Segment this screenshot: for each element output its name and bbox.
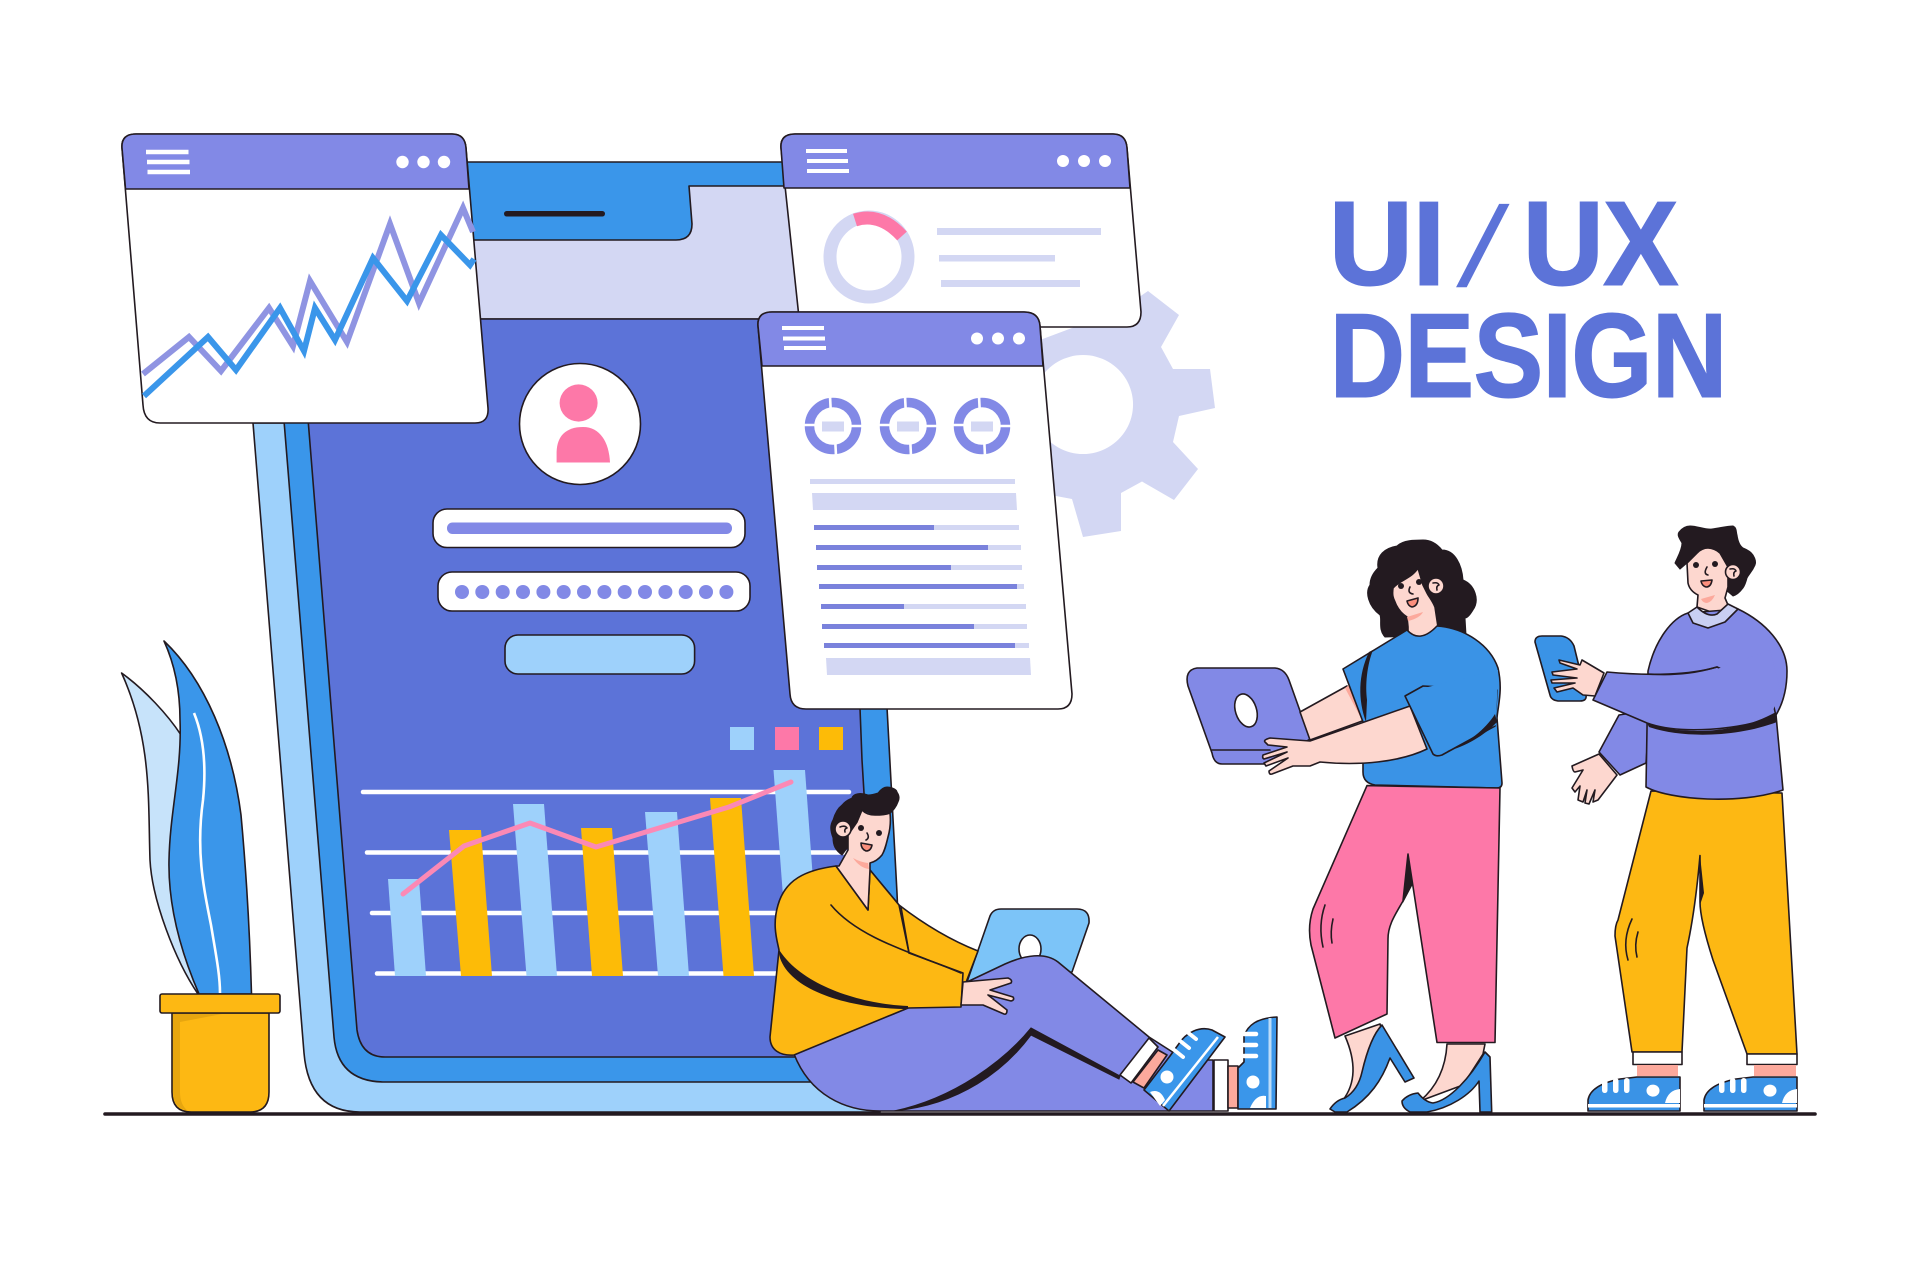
- phone screen: [300, 319, 880, 1057]
- title: UI/UX Design: /: [1447, 185, 1517, 309]
- progress bars: [814, 525, 1017, 648]
- socks: [1637, 1065, 1796, 1076]
- neck and face: [1393, 568, 1438, 639]
- front arm and hand: [1263, 706, 1427, 774]
- left heel: [1330, 1025, 1414, 1112]
- arm shadow: [1345, 680, 1368, 720]
- left leg: [1343, 1024, 1390, 1100]
- neck and face: [1687, 548, 1728, 614]
- lower hand: [1572, 754, 1617, 804]
- belt shadow: [1447, 714, 1497, 751]
- ear: [835, 821, 851, 837]
- window dots: [396, 156, 450, 168]
- person: man with phone: [1535, 526, 1797, 1111]
- title: UI/UX Design: [1329, 178, 1727, 422]
- window dots: [1057, 155, 1111, 167]
- line chart series: [143, 208, 473, 374]
- upper hand: [1551, 660, 1604, 696]
- username field: [433, 509, 745, 548]
- menu icon: [806, 151, 849, 171]
- stat rings: [803, 396, 1012, 456]
- ear: [1726, 564, 1740, 580]
- eyes: [1398, 579, 1422, 589]
- text lines: [937, 228, 1101, 287]
- far cuff and sock: [1214, 1060, 1238, 1111]
- gear icon: [1000, 291, 1215, 537]
- laptop: [967, 909, 1089, 982]
- window dots: [971, 332, 1025, 344]
- phone outer light-blue body: [253, 423, 880, 1112]
- phone: [253, 162, 905, 1112]
- near cuff and sock: [1120, 1038, 1167, 1088]
- hand: [961, 978, 1014, 1014]
- phone: [1535, 636, 1586, 701]
- person: seated man with laptop: [770, 787, 1277, 1111]
- neck shadow: [853, 858, 869, 869]
- hair: [831, 787, 899, 855]
- lavender header area with notch: [295, 186, 830, 319]
- potted plant: [122, 641, 280, 1112]
- left shoe: [1588, 1077, 1680, 1111]
- knee lines: [1321, 905, 1333, 947]
- window: dashboard stats: [758, 312, 1072, 709]
- left cuff: [1633, 1052, 1682, 1064]
- window: donut summary: [781, 134, 1141, 327]
- leaf vein: [194, 713, 220, 993]
- pot shadow: [173, 1014, 222, 1111]
- hair: [1675, 526, 1756, 596]
- crotch shadow: [1403, 854, 1413, 903]
- laptop: [1187, 668, 1310, 764]
- shirt thick shadow: [1360, 650, 1373, 722]
- neck shadow: [1407, 612, 1423, 621]
- eyes: [858, 825, 882, 836]
- title: UI/UX Design: UI: [1329, 178, 1445, 310]
- belt shadow: [1647, 712, 1777, 735]
- right cuff: [1747, 1054, 1797, 1064]
- back arm: [1300, 686, 1365, 740]
- pants: [1615, 791, 1797, 1054]
- trouser fold: [894, 1028, 1120, 1111]
- far shoe: [1238, 1017, 1277, 1109]
- right shoe: [1704, 1077, 1797, 1111]
- chart legend: [730, 727, 843, 750]
- pot rim: [160, 994, 280, 1013]
- phone blue frame: [263, 162, 905, 1082]
- shirt back sleeve: [870, 870, 978, 985]
- right heel: [1402, 1052, 1492, 1112]
- nose and mouth: [1407, 587, 1418, 607]
- bar chart: [363, 770, 858, 976]
- neck and face: [836, 810, 890, 910]
- neck shadow: [1701, 595, 1715, 603]
- title: UI/UX Design: DESIGN: [1330, 290, 1727, 422]
- back leaf: [122, 673, 198, 994]
- nose and mouth: [1701, 567, 1712, 587]
- back arm: [1599, 710, 1650, 775]
- shirt: [1343, 626, 1502, 788]
- ground line: [105, 1112, 1815, 1116]
- pants: [1310, 786, 1500, 1042]
- torso: [1646, 609, 1787, 799]
- front arm: [1593, 667, 1776, 730]
- menu icon: [782, 328, 826, 348]
- sleeve: [1405, 686, 1497, 756]
- crotch shadow: [1700, 855, 1704, 905]
- ear: [1428, 578, 1444, 594]
- near shoe: [1144, 1029, 1225, 1111]
- avatar: [520, 364, 640, 484]
- knee lines: [1626, 919, 1638, 960]
- window: line chart: [122, 134, 488, 423]
- hair: [1368, 540, 1476, 637]
- person: woman with laptop: [1187, 540, 1502, 1112]
- pot body: [172, 1013, 269, 1112]
- collar: [1688, 604, 1738, 628]
- donut chart: [830, 217, 908, 297]
- arm upper line: [1648, 667, 1717, 675]
- sleeve cover: [1424, 670, 1498, 750]
- shirt: [770, 866, 963, 1055]
- title: UI/UX Design: UX: [1523, 178, 1678, 310]
- front leaf: [164, 641, 252, 994]
- right leg: [1420, 1044, 1485, 1101]
- eyes: [1693, 561, 1718, 568]
- menu icon: [146, 152, 190, 172]
- trousers: [794, 956, 1213, 1111]
- nose and mouth: [861, 833, 872, 851]
- speaker bar: [504, 211, 605, 216]
- text bars: [810, 479, 1031, 675]
- arm and belt lines: [778, 905, 961, 1009]
- password field: [438, 572, 750, 611]
- login button: [505, 635, 695, 674]
- arm top cover: [1650, 650, 1780, 724]
